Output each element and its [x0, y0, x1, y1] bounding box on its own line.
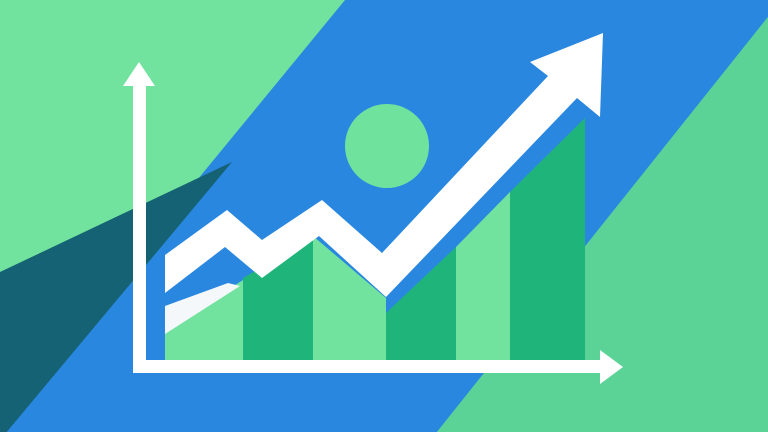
axes [123, 62, 623, 384]
icon: green circle [345, 104, 429, 188]
bar chart [165, 118, 585, 360]
background: lower right green [437, 17, 768, 432]
background: dark teal triangle [0, 162, 232, 432]
arrow: rising trend [165, 33, 603, 297]
secondary white stripe [165, 283, 240, 334]
